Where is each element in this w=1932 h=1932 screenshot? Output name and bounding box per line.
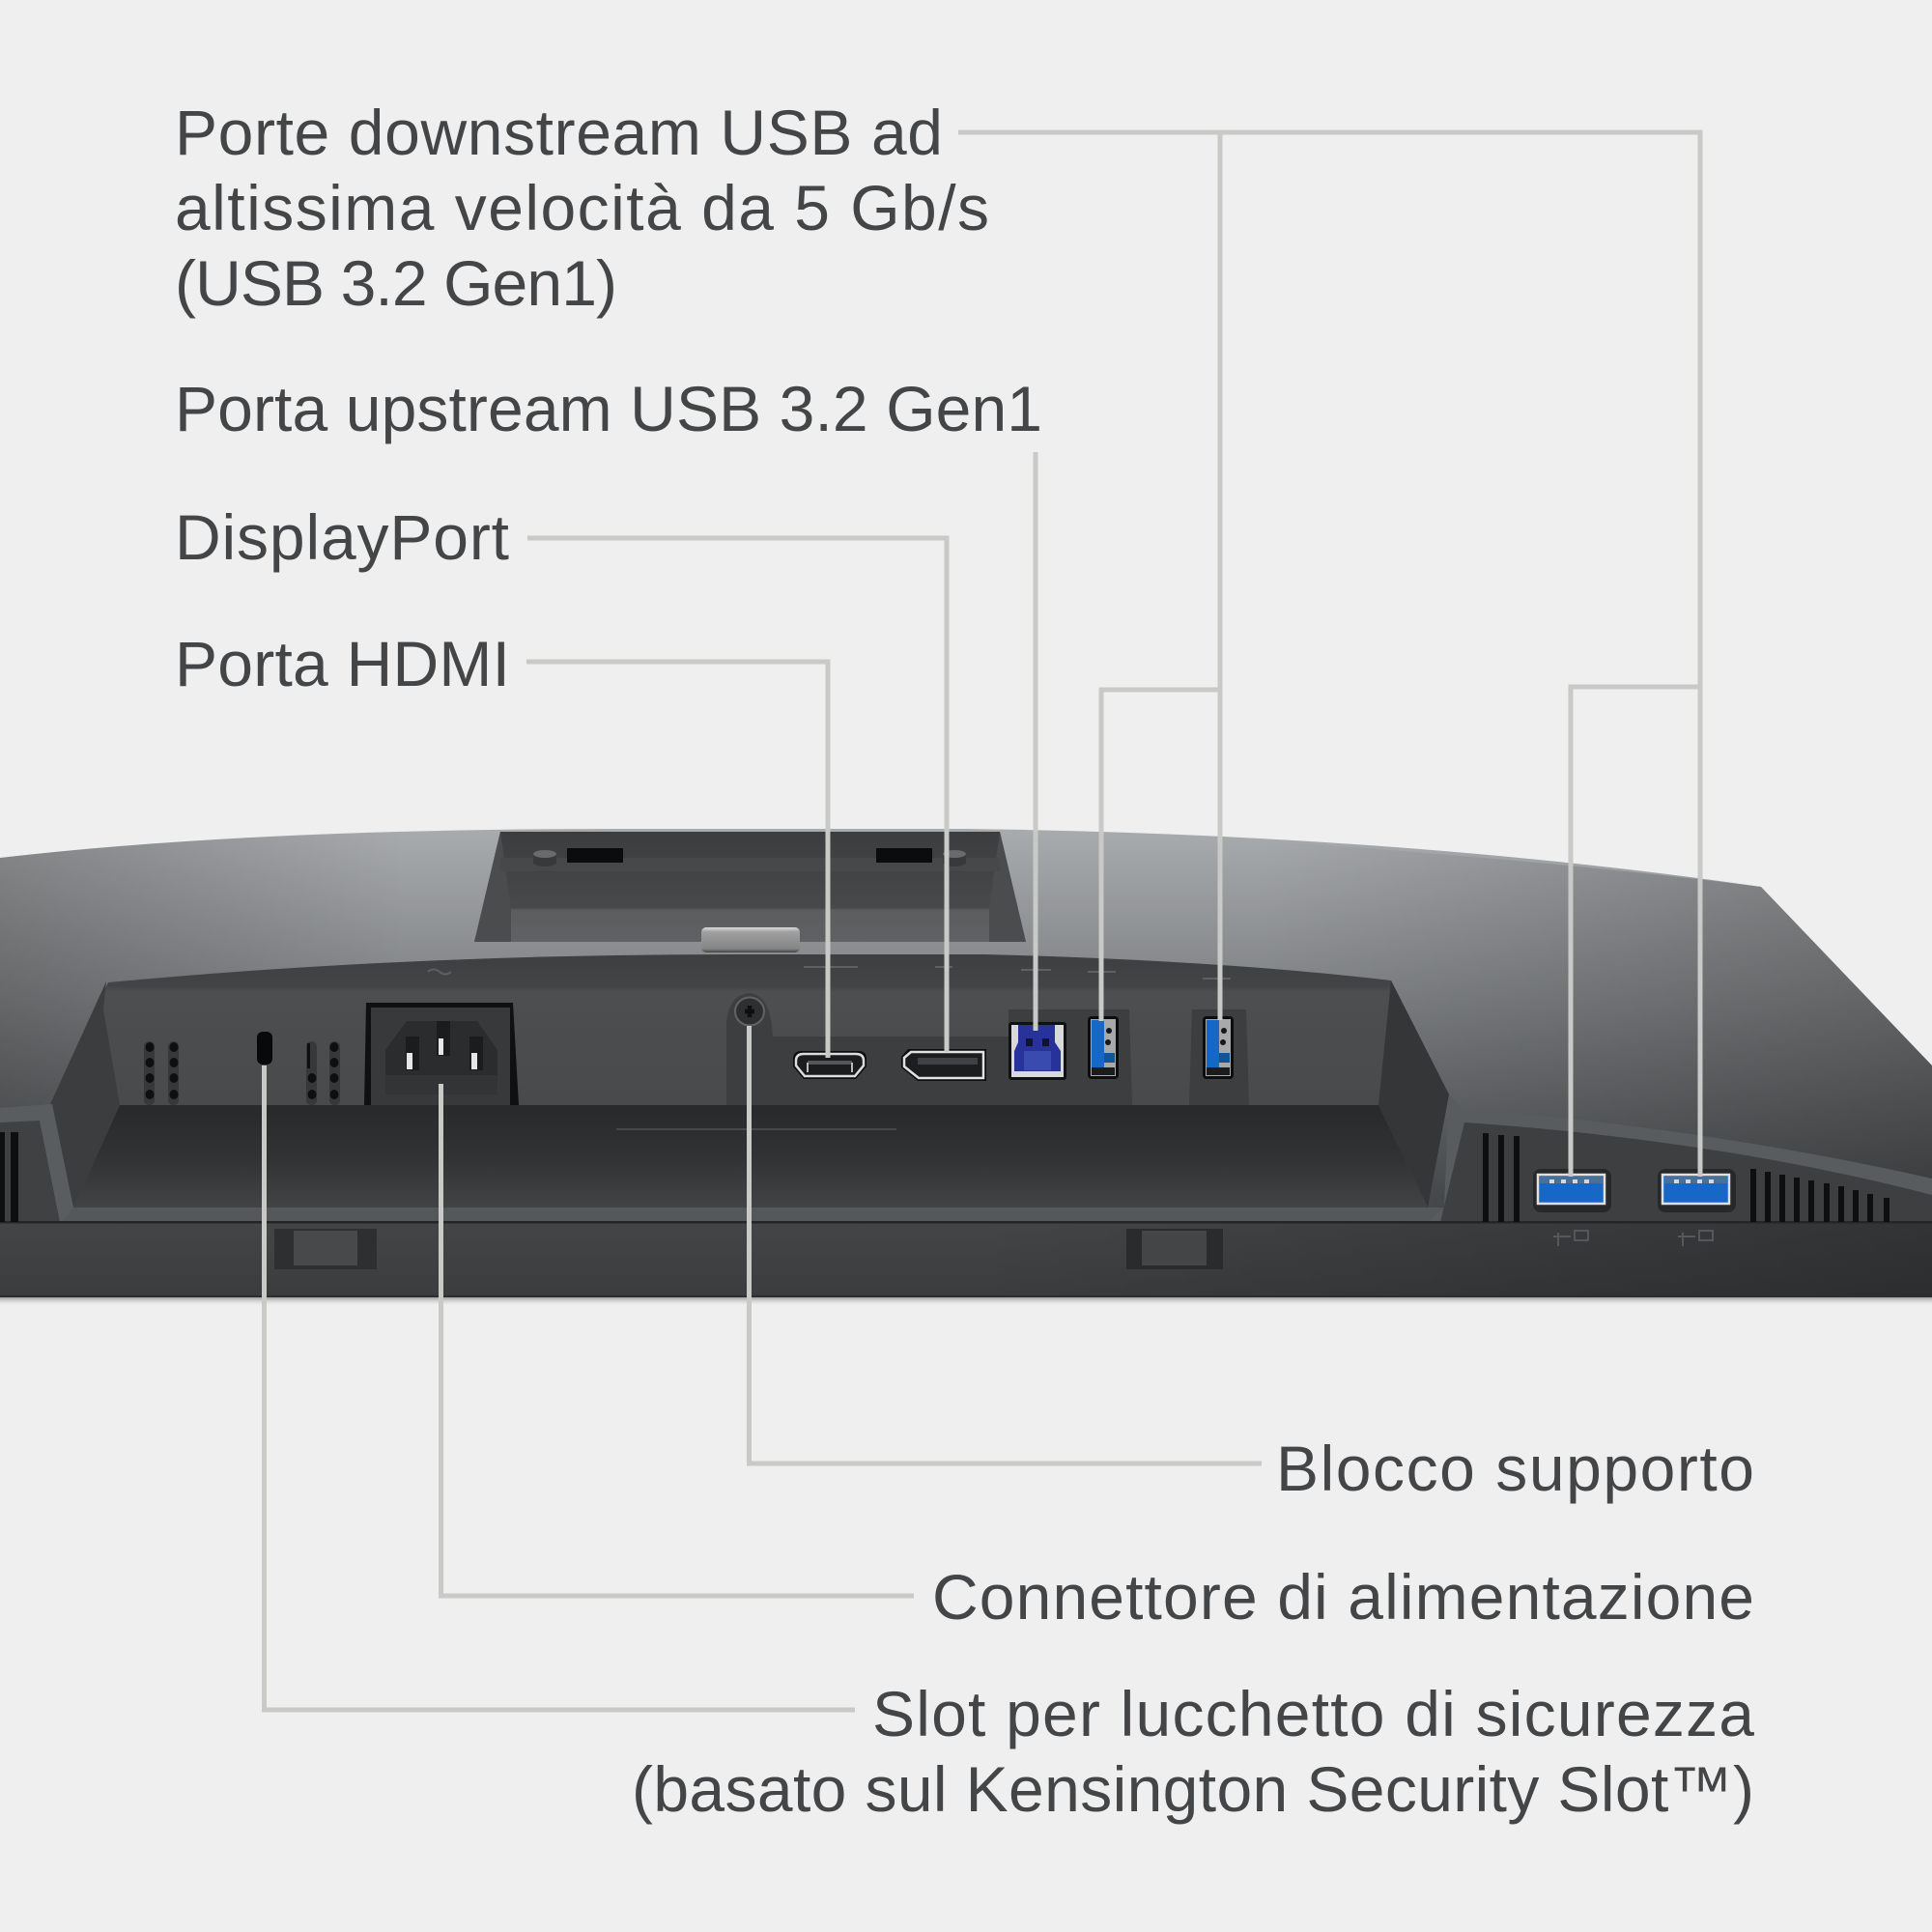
bottom bezel bar: [0, 1221, 1932, 1297]
label: security slot: Slot per lucchetto di sicurezza: [872, 1678, 1754, 1749]
label: USB downstream: altissima velocità da 5 Gb/s: [175, 172, 989, 243]
central vents: [144, 1041, 340, 1105]
side USB-A port 2: [1658, 1169, 1736, 1212]
label: security slot: [632, 1678, 1754, 1825]
USB-A port, vertical: [1088, 1016, 1119, 1079]
USB-A port, vertical, second: [1203, 1016, 1234, 1079]
label: USB upstream: Porta upstream USB 3.2 Gen1: [175, 373, 1042, 444]
leader: USB downstream ports: [958, 132, 1700, 1177]
stand release latch: [701, 927, 800, 952]
leader: stand lock: [750, 1026, 1262, 1463]
right bezel clip: [1126, 1229, 1223, 1269]
panel for USB-B and USB-A: [1009, 1009, 1132, 1105]
leader: HDMI: [526, 662, 828, 1058]
HDMI port: [793, 1051, 867, 1079]
stand mount recess: [474, 832, 1026, 942]
port bay: [50, 954, 1449, 1208]
label: DisplayPort: DisplayPort: [175, 501, 509, 573]
panel for single USB-A: [1189, 1009, 1249, 1105]
power connector: [364, 1003, 519, 1105]
label: power connector: Connettore di alimentazione: [932, 1561, 1754, 1633]
side USB-A port 1: [1533, 1169, 1611, 1212]
USB-B upstream port: [1009, 1022, 1066, 1080]
label: USB downstream: (USB 3.2 Gen1): [175, 247, 617, 319]
leader: security slot: [265, 1065, 855, 1710]
DisplayPort port: [901, 1049, 986, 1081]
leader: USB upstream: [1034, 452, 1037, 1031]
leader: DisplayPort: [527, 538, 947, 1052]
label: HDMI: Porta HDMI: [175, 628, 510, 699]
left bezel clip: [274, 1229, 377, 1269]
shadow under monitor: [0, 1297, 1932, 1306]
monitor back shell: [0, 829, 1932, 1297]
label: USB downstream: [175, 97, 989, 319]
leader: power connector: [440, 1084, 914, 1596]
rear panel for video ports: [726, 993, 1009, 1105]
lower lip and corner panels: [0, 1094, 1932, 1222]
label: stand lock: Blocco supporto: [1276, 1433, 1754, 1504]
embossed port marks: [428, 967, 1231, 979]
label: USB downstream: Porte downstream USB ad: [175, 97, 943, 168]
label: security slot: (basato sul Kensington Security Slot™): [632, 1753, 1754, 1825]
stand lock screw: [735, 997, 764, 1026]
monitor: rear view with ports: [0, 829, 1932, 1306]
security lock slot: [257, 1032, 272, 1065]
USB symbol marks: [1553, 1231, 1713, 1246]
right side vents: [1483, 1133, 1889, 1222]
left corner vents: [0, 1132, 18, 1222]
